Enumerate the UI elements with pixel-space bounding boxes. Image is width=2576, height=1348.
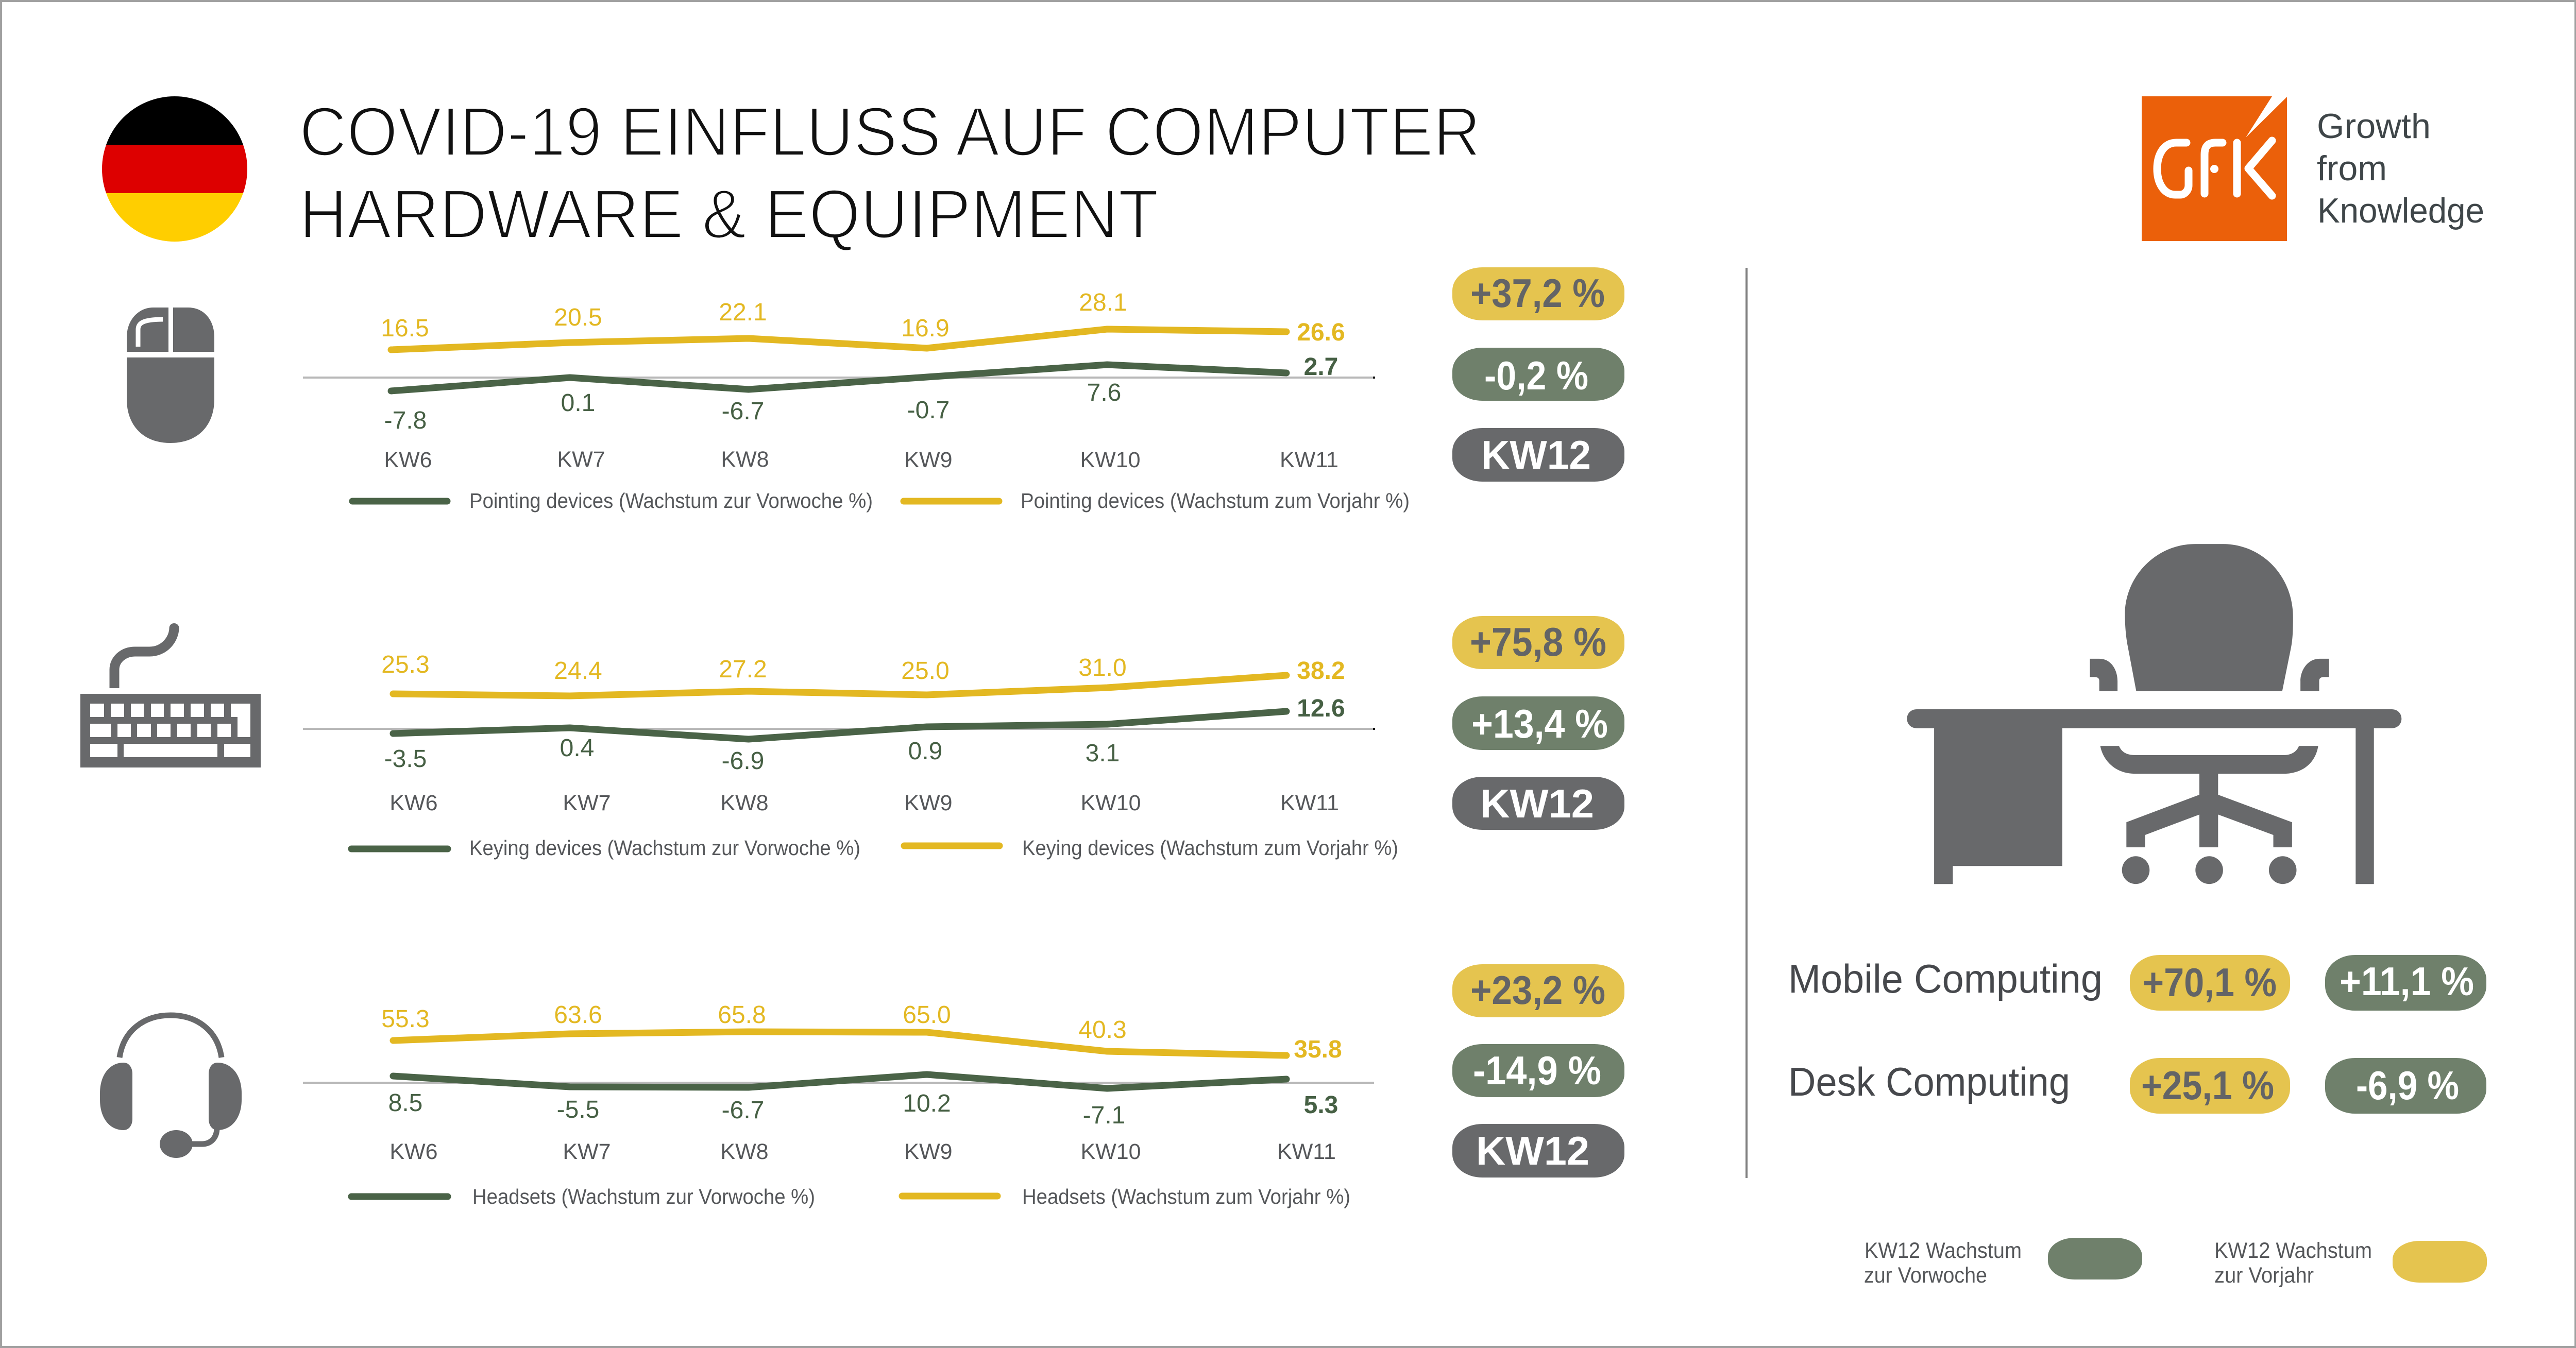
values: previous year: 16.5 (381, 315, 429, 342)
week labels: KW11 (1280, 448, 1338, 472)
week labels: KW10 (1080, 448, 1141, 472)
icon: desk and office chair (1907, 544, 2401, 884)
chart legend: Keying devices (Wachstum zum Vorjahr %) (1022, 836, 1398, 860)
pills: pointing devices KW12: KW12 (1481, 432, 1591, 477)
week labels (389, 1139, 1336, 1164)
row: mobile computing: +70,1 % (2143, 960, 2277, 1005)
pills: pointing devices KW12 (1452, 267, 1624, 482)
chart legend (351, 1185, 1350, 1208)
chart legend: Pointing devices (Wachstum zur Vorwoche %) (469, 489, 873, 513)
values: previous year: 25.3 (381, 651, 430, 678)
values: previous week (384, 353, 1338, 434)
values: previous week: 3.1 (1086, 740, 1120, 767)
week labels: KW10 (1080, 791, 1141, 815)
week labels (384, 447, 1338, 472)
week labels: KW7 (563, 791, 611, 815)
legend: growth vs previous week: zur Vorwoche (1864, 1263, 1987, 1288)
row: mobile computing: Mobile Computing (1788, 956, 2103, 1001)
pills: headsets KW12 (1452, 964, 1624, 1178)
values: previous week: 10.2 (903, 1090, 951, 1117)
values: previous week: -0.7 (907, 397, 950, 424)
values: previous year: 20.5 (554, 304, 602, 331)
week labels (389, 791, 1339, 815)
values: previous year: 16.9 (901, 315, 950, 342)
chart legend (351, 836, 1398, 860)
values: previous week (384, 695, 1345, 775)
line: headsets growth vs previous year (393, 1032, 1286, 1055)
values: previous year: 22.1 (719, 299, 767, 326)
chart: keying devices (303, 651, 1398, 860)
pills: pointing devices KW12: -0,2 % (1484, 353, 1588, 398)
chart: headsets (303, 1001, 1374, 1208)
values: previous week: 12.6 (1297, 695, 1345, 722)
pills: keying devices KW12: +13,4 % (1471, 701, 1608, 746)
values: previous year: 40.3 (1078, 1016, 1127, 1044)
values: previous week: -6.7 (722, 1097, 764, 1124)
values: previous week: -3.5 (384, 745, 427, 773)
icon: headset (100, 1015, 242, 1158)
logo tagline (2317, 107, 2484, 230)
values: previous week: -7.1 (1083, 1102, 1125, 1129)
chart legend: Headsets (Wachstum zum Vorjahr %) (1022, 1185, 1350, 1208)
title: HARDWARE & EQUIPMENT (299, 175, 1159, 253)
values: previous week: 0.1 (561, 389, 595, 417)
legend: growth vs previous year (2214, 1238, 2487, 1288)
week labels: KW6 (384, 448, 432, 472)
pills: keying devices KW12: KW12 (1480, 781, 1594, 826)
values: previous week: 2.7 (1304, 353, 1338, 381)
values: previous week (388, 1089, 1338, 1129)
legend: growth vs previous year: KW12 Wachstum (2214, 1238, 2372, 1263)
values: previous year (381, 1001, 1342, 1063)
values: previous year: 25.0 (901, 657, 950, 685)
title: COVID-19 EINFLUSS AUF COMPUTER (299, 93, 1481, 170)
week labels: KW10 (1080, 1139, 1141, 1164)
icon: German flag (102, 96, 247, 242)
pills: headsets KW12: -14,9 % (1473, 1048, 1601, 1093)
pills: keying devices KW12 (1452, 616, 1624, 830)
week labels: KW7 (563, 1139, 611, 1164)
values: previous week: 0.4 (560, 735, 594, 762)
values: previous year: 28.1 (1079, 289, 1127, 316)
pills: headsets KW12: KW12 (1476, 1128, 1589, 1173)
values: previous week: -6.9 (722, 747, 764, 775)
logo tagline: Growth (2317, 107, 2431, 146)
chart: pointing devices (303, 289, 1410, 513)
values: previous week: -5.5 (557, 1096, 599, 1123)
values: previous year: 65.0 (903, 1001, 951, 1029)
values: previous week: -7.8 (384, 407, 427, 434)
values: previous week: 0.9 (908, 738, 942, 765)
values: previous year: 55.3 (381, 1005, 430, 1033)
values: previous year: 63.6 (554, 1001, 602, 1029)
week labels: KW8 (720, 791, 769, 815)
week labels: KW6 (389, 791, 438, 815)
chart legend (352, 489, 1410, 513)
values: previous year: 35.8 (1294, 1036, 1342, 1063)
values: previous year: 38.2 (1297, 657, 1345, 685)
values: previous week: -6.7 (722, 398, 764, 425)
row: desk computing: -6,9 % (2356, 1063, 2459, 1108)
row: mobile computing (1788, 955, 2486, 1011)
line: pointing devices growth vs previous year (391, 329, 1286, 350)
week labels: KW8 (721, 447, 769, 472)
line: headsets growth vs previous week (393, 1074, 1286, 1088)
values: previous year: 27.2 (719, 656, 767, 683)
row: desk computing: Desk Computing (1788, 1059, 2070, 1104)
week labels: KW11 (1280, 791, 1339, 815)
chart legend: Headsets (Wachstum zur Vorwoche %) (472, 1185, 815, 1208)
legend: growth vs previous year: zur Vorjahr (2214, 1263, 2314, 1288)
pills: keying devices KW12: +75,8 % (1470, 619, 1606, 664)
week labels: KW9 (904, 448, 953, 472)
row: desk computing: +25,1 % (2141, 1063, 2274, 1108)
values: previous year (381, 289, 1345, 346)
line: keying devices growth vs previous year (393, 675, 1286, 696)
logo tagline: from (2317, 149, 2387, 188)
values: previous week: 5.3 (1304, 1091, 1338, 1119)
legend: growth vs previous week (1864, 1238, 2142, 1288)
values: previous year: 26.6 (1297, 319, 1345, 346)
icon: keyboard (80, 623, 261, 767)
values: previous week: 8.5 (388, 1089, 422, 1117)
title (299, 93, 1481, 253)
week labels: KW8 (720, 1139, 769, 1164)
row: desk computing (1788, 1058, 2486, 1114)
values: previous week: 7.6 (1087, 379, 1121, 406)
values: previous year: 65.8 (718, 1001, 766, 1029)
week labels: KW9 (904, 791, 953, 815)
chart legend: Keying devices (Wachstum zur Vorwoche %) (469, 836, 860, 860)
week labels: KW6 (389, 1139, 438, 1164)
values: previous year (381, 651, 1345, 685)
icon: mouse (127, 308, 214, 443)
values: previous year: 24.4 (554, 657, 602, 685)
chart legend: Pointing devices (Wachstum zum Vorjahr %) (1021, 489, 1410, 513)
line: pointing devices growth vs previous week (391, 365, 1286, 391)
line: keying devices growth vs previous week (393, 711, 1286, 739)
pills: headsets KW12: +23,2 % (1470, 967, 1605, 1013)
logo: GfK (2142, 96, 2287, 241)
row: mobile computing: +11,1 % (2340, 959, 2474, 1004)
week labels: KW11 (1277, 1139, 1336, 1164)
pills: pointing devices KW12: +37,2 % (1470, 270, 1605, 316)
legend: growth vs previous week: KW12 Wachstum (1865, 1238, 2022, 1263)
week labels: KW7 (557, 447, 605, 472)
week labels: KW9 (904, 1139, 953, 1164)
values: previous year: 31.0 (1078, 654, 1127, 681)
logo tagline: Knowledge (2317, 191, 2484, 230)
